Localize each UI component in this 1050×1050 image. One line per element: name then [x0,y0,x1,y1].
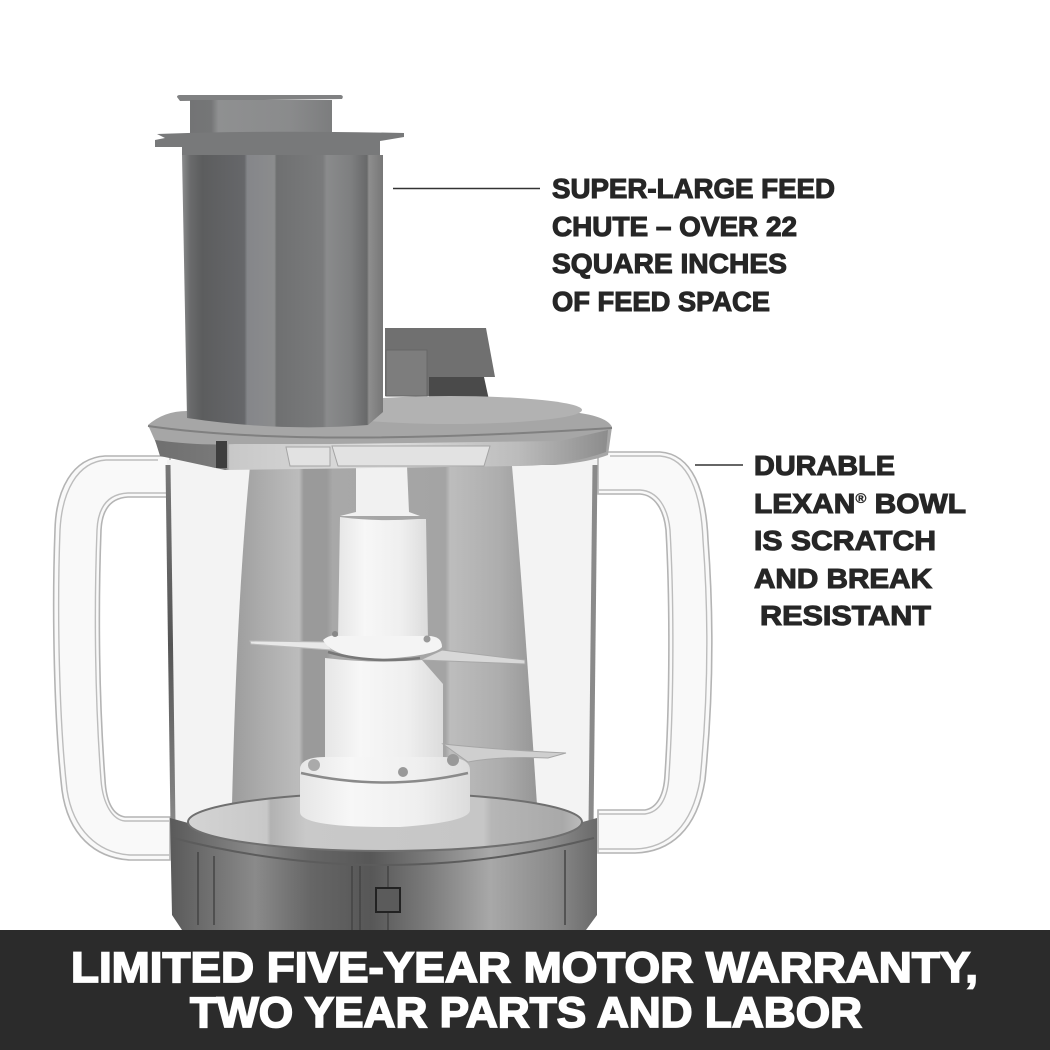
pusher neck [190,100,332,133]
callout: Lexan bowl: DURABLE [754,450,895,481]
callout: feed chute [552,173,835,317]
blade assembly [250,466,566,827]
callout: Lexan bowl: ® [855,490,867,506]
callout: Lexan bowl: BOWL [866,488,966,519]
warranty banner [0,930,1050,1050]
callout: feed chute: SQUARE INCHES [552,248,787,279]
feed chute pusher [155,95,404,427]
central stem [340,466,420,516]
food processor product photo [54,95,712,930]
bowl floor plate [188,793,582,851]
warranty banner: LIMITED FIVE-YEAR MOTOR WARRANTY, [71,944,978,992]
pusher top disc [177,95,343,101]
lower blade [443,744,566,762]
upper collar [323,631,442,660]
latch [376,888,400,912]
callout: feed chute: OF FEED SPACE [552,286,770,317]
callout: Lexan bowl: IS SCRATCH [754,525,936,556]
motor base [170,818,597,930]
lower collar and base [300,754,470,827]
callout: Lexan bowl: AND BREAK [754,563,932,594]
callout: Lexan bowl [754,450,966,631]
transparent bowl body [167,460,597,850]
warranty banner: TWO YEAR PARTS AND LABOR [190,989,862,1037]
back tab of lid [385,328,495,400]
callout: Lexan bowl: RESISTANT [760,600,931,631]
callout: Lexan bowl: LEXAN [754,488,849,519]
upper blade right [420,650,525,664]
chute cylinder [182,155,383,427]
leader line: bowl [695,464,743,466]
bowl lid [148,396,612,470]
right bowl handle [598,452,712,853]
callout: feed chute: SUPER-LARGE FEED [552,173,835,204]
lower hub [325,658,443,770]
left bowl handle [54,456,170,860]
chute flange [155,132,404,155]
leader line: feed chute [393,188,540,190]
callout: feed chute: CHUTE – OVER 22 [552,211,797,242]
upper hub [338,517,428,640]
upper blade left [250,641,332,650]
